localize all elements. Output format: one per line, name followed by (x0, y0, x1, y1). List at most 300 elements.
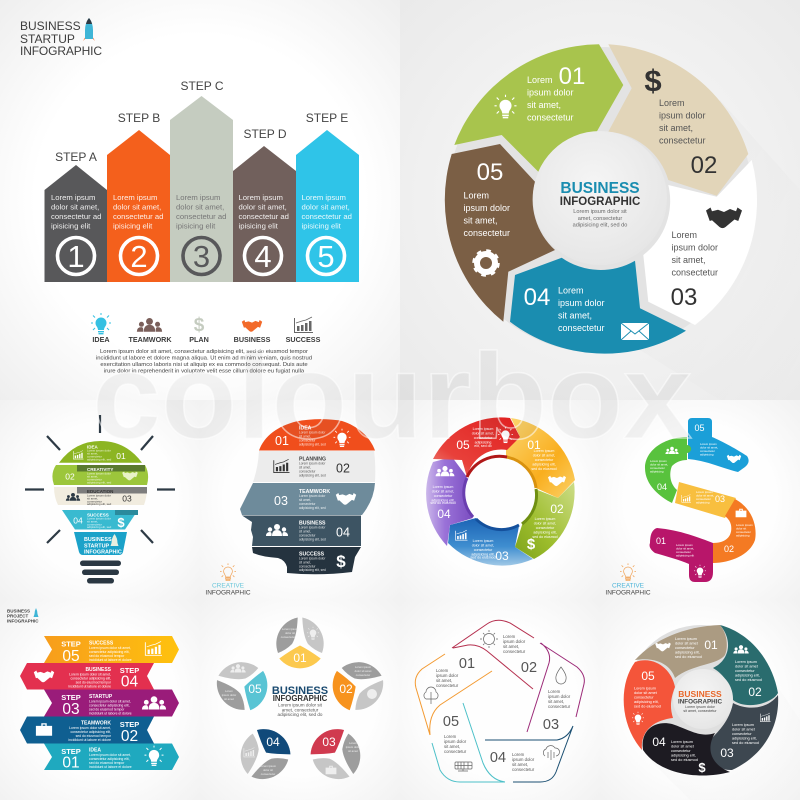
swirl 04: $ (698, 760, 706, 775)
swirl 03 (710, 695, 778, 770)
puzzle 01: 01 (656, 536, 666, 546)
swirl 01: sed do eiusmod (675, 655, 702, 659)
petal text: dolor sit (263, 768, 273, 772)
puzzle 02: 02 (724, 544, 734, 554)
arrow A: Lorem ipsum (51, 193, 95, 202)
band 04: consectetur (87, 522, 102, 526)
arrow B (107, 111, 170, 282)
arrow D: STEP D (243, 127, 287, 141)
arrow B: consectetur ad (113, 212, 163, 221)
ribbon 04: sed do eiusmod tempor (76, 680, 112, 684)
lorem labels: consectetur (503, 649, 526, 654)
band 02: adipisicing elit, sed (87, 480, 112, 484)
head 01: IDEA (299, 426, 312, 432)
head 04: 04 (336, 526, 350, 540)
rays (25, 415, 175, 543)
swirl 05: Lorem ipsum (634, 686, 656, 690)
ribbon 04: BUSINESS (85, 667, 112, 673)
ribbon 04: incididunt ut labore et dolore (68, 684, 111, 688)
arrow D: ipisicing elit (238, 222, 279, 230)
lorem labels: Lorem (548, 689, 561, 694)
arrow B: Lorem ipsum (113, 193, 157, 202)
centre title: amet, consectetur (282, 708, 319, 712)
swirl 04 (643, 723, 730, 776)
segment 04: 04 (524, 284, 550, 311)
swirl 01: adipisicing elit, (675, 650, 700, 654)
swirl 04: Lorem ipsum (671, 740, 693, 744)
segment 01: sit amet, (527, 100, 561, 110)
segment 03: consectetur (672, 268, 718, 278)
puzzle 05: adipisicing (700, 452, 714, 456)
panel: five petal circles (210, 618, 390, 789)
segment 05: ipsum dolor (464, 203, 510, 213)
ring segment 03: consectetur (474, 548, 493, 552)
ribbon 03: 03 (62, 701, 80, 718)
circle 01 (276, 618, 324, 668)
ribbon 03: STARTUP (89, 694, 113, 700)
band 01: 01 (116, 451, 126, 461)
icon: rocket (83, 18, 95, 41)
head 01 (259, 419, 375, 450)
ribbon 01: consectetur adipisicing elit, (89, 757, 130, 761)
panel: swirl circle (624, 625, 800, 800)
arrow E: Lorem ipsum (302, 193, 346, 202)
puzzle 03 (675, 482, 736, 518)
segment 02 (608, 44, 748, 196)
arrow B: 2 (130, 239, 148, 274)
lorem labels: ipsum dolor (436, 673, 459, 678)
swirl 01: 01 (704, 638, 718, 652)
arrow A: dolor sit amet, (51, 202, 99, 212)
ring segment 01: sed do eiusmod (531, 467, 557, 471)
circle 04: 04 (266, 735, 280, 749)
band 03 (54, 487, 147, 506)
arrow A (44, 150, 107, 282)
puzzle 05: consectetur (700, 449, 715, 453)
creative infographic logo 2 (605, 563, 651, 596)
head 02: consectetur (299, 470, 316, 474)
ring segment 05 (433, 417, 520, 477)
lorem labels (436, 634, 571, 772)
puzzle 01: adipisicing elit (676, 554, 694, 558)
numbers: 03 (543, 717, 559, 733)
swirl 03: sed do eiusmod (732, 741, 759, 745)
arrow A: consectetur ad (51, 212, 101, 221)
lorem labels: consectetur (512, 767, 535, 772)
puzzle 03: adipisicing (696, 500, 710, 504)
ring segment 04: sed do eiusmod (430, 501, 456, 505)
segment 03: Lorem (672, 230, 697, 240)
arrow B: dolor sit amet, (113, 202, 161, 212)
centre hub: amet, consectetur (578, 216, 622, 222)
petal text: consectetur (281, 635, 295, 639)
ring segment 04: dolor sit amet, (432, 490, 454, 494)
lorem labels: consectetur (444, 749, 467, 754)
numbers: 04 (490, 750, 506, 766)
arrow E (296, 111, 359, 282)
ring segment 01: adipisicing elit, (532, 462, 556, 466)
segment 05: 05 (477, 159, 503, 186)
line 01 (415, 654, 492, 735)
arrow E: dolor sit amet, (302, 202, 350, 212)
ring segment 04: 04 (437, 507, 451, 521)
ribbon 05: STEP (61, 640, 81, 648)
petal text: Lorem ipsum (260, 764, 277, 768)
centre hub (533, 131, 667, 265)
arrow D: Lorem ipsum (238, 193, 283, 202)
segment 02: $ (644, 63, 662, 98)
segment 04: consectetur (558, 323, 605, 333)
ring segment 01: 01 (527, 438, 541, 452)
bulb base: STARTUP (84, 544, 109, 550)
ribbon 04: Lorem ipsum dolor sit amet, (69, 672, 111, 676)
segment 04: sit amet, (558, 310, 592, 320)
band 01: Lorem ipsum dolor (87, 448, 111, 452)
arrow C: ipisicing elit (176, 222, 216, 230)
circle 02 (327, 655, 390, 716)
ring segment 05: consectetur (474, 436, 493, 440)
puzzle 02: adipisicing (736, 534, 750, 538)
petal text: Lorem ipsum (355, 665, 372, 669)
swirl centre (673, 669, 733, 729)
petal text: dolor sit amet (355, 669, 372, 673)
lorem labels: sit amet, (444, 744, 460, 749)
long shadow (640, 100, 800, 400)
lorem labels: consectetur (436, 683, 459, 688)
icon row (91, 313, 321, 344)
circle 01: 01 (293, 651, 307, 665)
ring segment 03: adipisicing elit, (471, 552, 495, 556)
puzzle 01 (650, 528, 713, 582)
lorem labels: ipsum dolor (503, 639, 526, 644)
swirl 01 (635, 625, 727, 678)
panel: dollar sign puzzle (605, 418, 756, 596)
centre title: adipisicing elit, sed do (278, 712, 323, 717)
base ring (447, 47, 753, 353)
swirl 04: consectetur (671, 749, 691, 753)
petal text: Lorem (225, 689, 234, 693)
head 05: consectetur (299, 564, 316, 568)
bulb screw (80, 560, 121, 584)
swirl 03: Lorem ipsum (732, 723, 754, 727)
panel: big cycle diagram (445, 44, 800, 400)
ring segment 02: sed do eiusmod (532, 535, 558, 539)
swirl 02: 02 (748, 685, 762, 699)
ribbon 03: STEP (61, 693, 81, 702)
panel: 3D arrow ring (426, 417, 575, 566)
lorem labels: sit amet, (503, 644, 519, 649)
segment 02: consectetur (659, 136, 706, 146)
head 03: sit amet, (299, 498, 311, 502)
ring segment 04 (426, 457, 473, 546)
band 01: consectetur (87, 454, 102, 458)
band 03: sit amet, (87, 496, 98, 500)
ring segment 02: $ (527, 536, 536, 553)
head 05: SUCCESS (299, 552, 325, 558)
numbers (443, 656, 559, 766)
head 05: $ (336, 552, 346, 571)
band 03: 03 (122, 494, 132, 504)
swirl 02: adipisicing elit, (735, 674, 760, 678)
segment 04 (510, 258, 686, 354)
swirl 03: 03 (720, 746, 734, 760)
line 03 (527, 643, 584, 732)
circle 05 (210, 655, 273, 716)
band 02: 02 (65, 472, 75, 482)
head 05: sit amet, (299, 560, 311, 564)
centre title: BUSINESS (272, 685, 328, 697)
band 03: Lorem ipsum dolor (87, 494, 111, 498)
arrow C: dolor sit amet, (176, 202, 224, 212)
creative infographic logo 2: INFOGRAPHIC (605, 590, 651, 596)
band 03: adipisicing elit, sed (87, 502, 112, 506)
lorem labels: sit amet, (548, 699, 564, 704)
ribbon 03: Lorem ipsum dolor sit amet, (89, 700, 131, 704)
ring segment 05: elit, sed do (474, 444, 492, 448)
band 01: sit amet, (87, 452, 98, 456)
lorem labels: Lorem (512, 752, 525, 757)
petal text: consectetur (356, 673, 370, 677)
swirl 02: Lorem ipsum (735, 660, 757, 664)
ring segment 02: Lorem ipsum (535, 517, 555, 521)
swirl 05: dolor sit amet (634, 691, 658, 695)
text block: incididunt ut labore et dolore magna aliqua. Ut enim ad minim veniam, quis nostrud (96, 356, 312, 362)
arrow A: 1 (67, 239, 85, 274)
arrow A: STEP A (55, 150, 97, 164)
segment 05 (445, 144, 555, 322)
swirl 03: consectetur (732, 732, 752, 736)
head 01: consectetur (299, 438, 316, 442)
arrow C: Lorem ipsum (176, 193, 220, 202)
puzzle 04: Lorem ipsum (650, 459, 667, 463)
swirl 04: sed do eiusmod (671, 758, 698, 762)
ribbon 01: IDEA (89, 748, 101, 754)
ribbon 05: SUCCESS (89, 640, 114, 646)
panel: pentagon outline (415, 620, 584, 782)
band 02 (52, 465, 148, 485)
head 03: 03 (274, 494, 288, 508)
arrow C: 3 (193, 239, 210, 274)
numbers: 02 (521, 660, 537, 676)
ring segment 05: Lorem ipsum (473, 427, 493, 431)
icon row: BUSINESS (234, 335, 271, 344)
band 04 (62, 510, 138, 530)
ring segment 03: 03 (495, 549, 509, 563)
puzzle 03: Lorem ipsum (696, 490, 713, 494)
puzzle 05 (688, 418, 749, 472)
centre title: INFOGRAPHIC (273, 694, 328, 703)
text block: irure dolor in reprehenderit in voluptate velit esse cillum dolore eu fugiat nulla (104, 368, 305, 374)
lorem labels: Lorem (436, 668, 449, 673)
centre hub: BUSINESS (560, 180, 640, 197)
segment 02: sit amet, (659, 123, 693, 133)
ring segment 03: sed do eiusmod (470, 556, 496, 560)
title: business startup infographic: STARTUP (20, 32, 75, 46)
band 02: sit amet, (87, 474, 98, 478)
small title: INFOGRAPHIC (7, 618, 39, 624)
text block: exercitation ullamco laboris nisi ut aliquip ex ea commodo consequat. Duis aute (100, 362, 308, 368)
swirl 03: adipisicing elit, (732, 736, 757, 740)
puzzle 05: 05 (694, 423, 705, 433)
text block (96, 349, 312, 374)
centre hub: adipisicing elit, sed do (573, 222, 627, 228)
creative infographic logo (205, 563, 251, 596)
ring segment 04: consectetur (434, 494, 453, 498)
band 01 (59, 441, 142, 463)
circle 05: 05 (248, 682, 262, 696)
band 04: Lorem ipsum dolor (87, 516, 111, 520)
head 03: Lorem ipsum dolor (299, 494, 326, 498)
segment 01: ipsum dolor (527, 88, 574, 98)
petal text: ipsum dolor (222, 693, 236, 697)
head 04: sit amet, (299, 530, 311, 534)
ribbon 02 (20, 716, 154, 745)
lorem labels: ipsum dolor (444, 739, 467, 744)
arrow D: dolor sit amet, (238, 202, 287, 212)
swirl centre: Lorem ipsum dolor (685, 705, 716, 709)
centre title (272, 685, 328, 717)
lorem labels: Lorem (503, 634, 516, 639)
ring segment 02: consectetur (536, 526, 555, 530)
segment 05: Lorem (464, 190, 489, 200)
head 03: TEAMWORK (299, 489, 330, 495)
puzzle 01: Lorem ipsum (676, 543, 693, 547)
puzzle 01: consectetur (676, 550, 691, 554)
numbers: 05 (443, 714, 459, 730)
icon row: SUCCESS (286, 335, 321, 344)
ribbon 02: TEAMWORK (81, 720, 111, 726)
icon row: TEAMWORK (128, 335, 172, 344)
segment 01: Lorem (527, 75, 553, 85)
creative infographic logo: CREATIVE (212, 582, 245, 590)
creative infographic logo: INFOGRAPHIC (205, 590, 251, 596)
circle 02: 02 (339, 682, 353, 696)
ring segment 03: dolor sit amet, (472, 544, 494, 548)
head 03 (240, 483, 375, 515)
arrow E: 5 (317, 239, 335, 274)
icon row: IDEA (92, 335, 110, 344)
puzzle 05: dolor sit amet, (700, 446, 718, 450)
puzzle 05: Lorem ipsum (700, 442, 717, 446)
segment 05: consectetur (464, 228, 510, 238)
ring segment 04: adipisicing elit, (431, 498, 455, 502)
arrow E: consectetur ad (302, 212, 352, 221)
swirl 01: dolor sit amet (675, 642, 699, 646)
panel: head profile (205, 419, 375, 596)
head 03: consectetur (299, 502, 316, 506)
puzzle 04: adipisicing (650, 470, 664, 474)
ribbon 03: consectetur adipisicing elit, (89, 704, 130, 708)
head 04: consectetur (299, 534, 316, 538)
panel: ribbon steps (7, 608, 179, 772)
head 04: adipisicing elit, sed (299, 538, 326, 542)
swirl 01: Lorem ipsum (675, 637, 697, 641)
head 02 (253, 451, 375, 482)
small title (7, 608, 39, 624)
head 01: 01 (275, 434, 289, 448)
band 01: IDEA (87, 444, 99, 450)
swirl centre: INFOGRAPHIC (678, 698, 722, 706)
line 05 (432, 703, 505, 782)
ring segment 04: Lorem ipsum (433, 485, 453, 489)
swirl 02: sed do eiusmod (735, 678, 762, 682)
ribbon 02: sed do eiusmod tempor (76, 734, 112, 738)
head 02: 02 (336, 462, 350, 476)
ring segment 05: 05 (456, 438, 470, 452)
ribbon 05: Lorem ipsum dolor sit amet, (89, 646, 131, 650)
ribbon 04: consectetur adipisicing elit, (70, 676, 111, 680)
puzzle 01: dolor sit amet, (676, 546, 694, 550)
head 02: PLANNING (299, 456, 326, 462)
ribbon 01: STEP (61, 747, 81, 756)
puzzle 04: consectetur (650, 466, 665, 470)
ribbon 05: incididunt ut labore et dolore (89, 658, 132, 662)
bulb base: INFOGRAPHIC (84, 550, 122, 556)
swirl 05 (624, 660, 675, 750)
panel: step arrows (20, 18, 359, 374)
segment 04: ipsum dolor (558, 298, 605, 308)
ribbon 01 (44, 744, 179, 772)
puzzle 02 (713, 499, 756, 563)
swirl 04: 04 (652, 735, 666, 749)
ring segment 02: 02 (550, 502, 564, 516)
ribbon 02: consectetur adipisicing elit, (70, 730, 111, 734)
petal text: sit amet (224, 697, 234, 701)
swirl centre: BUSINESS (678, 689, 722, 699)
band 04: $ (117, 515, 125, 530)
ribbon 02: STEP (120, 720, 139, 729)
arrow B: ipisicing elit (113, 222, 153, 230)
ribbon 05: consectetur adipisicing elit, (89, 650, 130, 654)
ribbon 04: STEP (120, 666, 139, 675)
segment 03 (643, 160, 757, 325)
head 02: adipisicing elit, sed (299, 474, 326, 478)
text block: Lorem ipsum dolor sit amet, consectetur adipisicing elit, sed do eiusmod tempor (100, 349, 308, 355)
ribbon 05: sed do eiusmod tempor (89, 654, 125, 658)
arrow D: 4 (254, 239, 272, 274)
panel: lightbulb (25, 415, 175, 584)
arrow C: STEP C (180, 79, 224, 93)
ribbon 03: incididunt ut labore et dolore (89, 712, 132, 716)
ribbon 01: Lorem ipsum dolor sit amet, (89, 753, 131, 757)
circle 03: 03 (322, 735, 336, 749)
small title: PROJECT (7, 614, 29, 618)
petal text: dolor sit (285, 631, 295, 635)
bulb base: BUSINESS (84, 537, 112, 543)
petal text: Lorem (349, 741, 358, 745)
ring segment 01: dolor sit amet, (533, 454, 555, 458)
ribbon 01: 01 (62, 754, 80, 772)
swirl 05: 05 (641, 669, 655, 683)
ring segment 05: dolor sit amet, (472, 432, 494, 436)
centre title: Lorem ipsum dolor sit (278, 702, 323, 708)
numbers: 01 (459, 656, 475, 672)
segment 03: ipsum dolor (672, 242, 718, 252)
ring segment 02: dolor sit amet, (534, 522, 556, 526)
icon row: PLAN (189, 335, 209, 344)
swirl 03: dolor sit amet (732, 728, 756, 732)
lorem labels: sit amet, (436, 678, 452, 683)
puzzle 02: consectetur (736, 530, 751, 534)
segment 02: Lorem (659, 98, 685, 108)
band 04: sit amet, (87, 520, 98, 524)
head 04: Lorem ipsum dolor (299, 526, 326, 530)
swirl 02 (713, 625, 778, 705)
segment 03: sit amet, (672, 255, 706, 265)
lorem labels: Lorem (444, 734, 457, 739)
title: business startup infographic: INFOGRAPHIC (20, 44, 102, 58)
head 04 (242, 516, 361, 546)
